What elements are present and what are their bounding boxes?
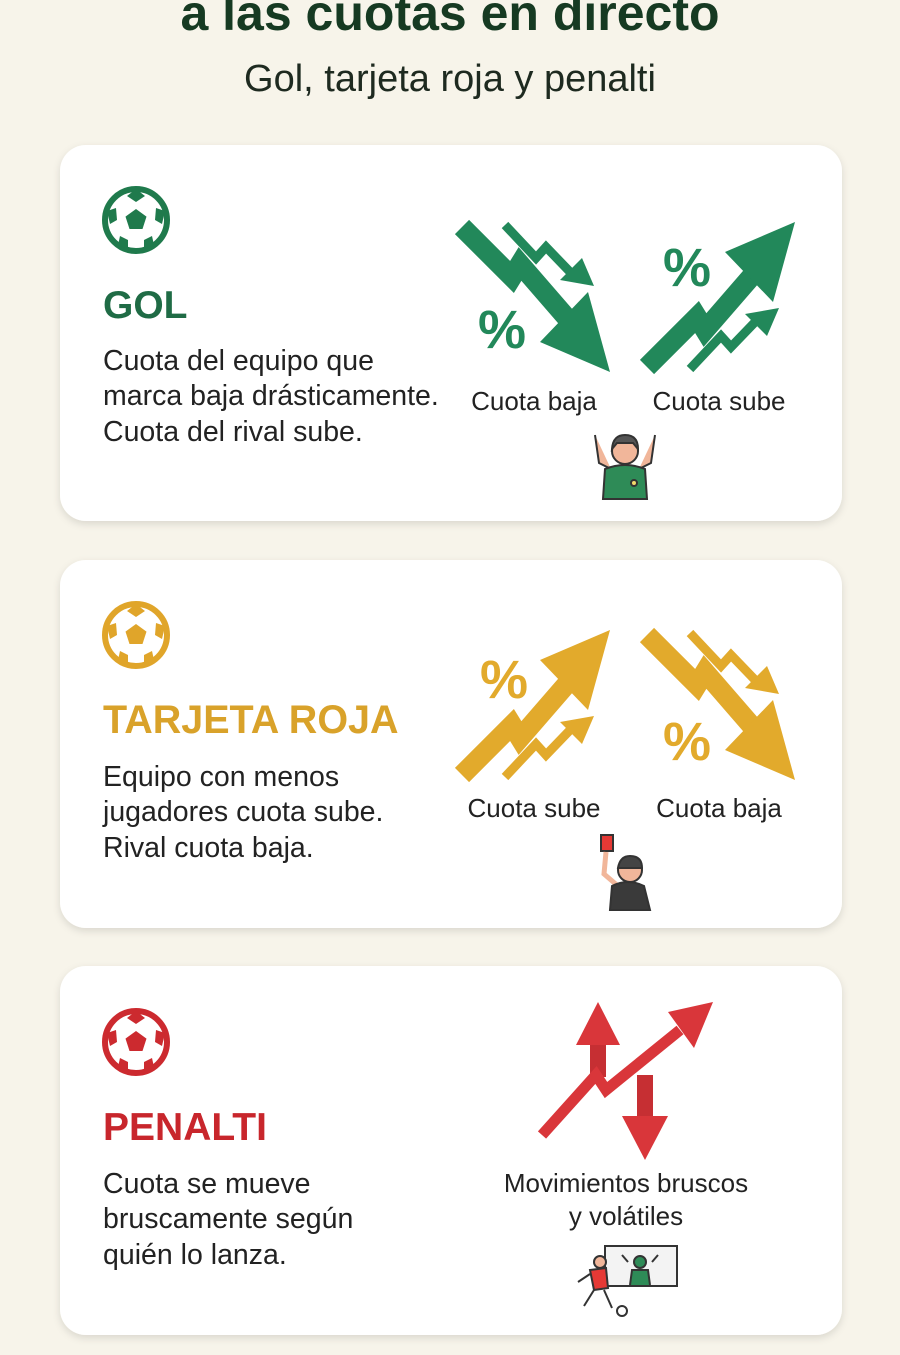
text block: penalti: quién lo lanza. — [103, 1239, 287, 1271]
icon: arrow up green — [647, 222, 795, 369]
text block: penalti: bruscamente según — [103, 1203, 353, 1235]
text block: gol: marca baja drásticamente. — [103, 380, 439, 412]
subtitle: Gol, tarjeta roja y penalti — [244, 58, 656, 100]
text block: penalti: Cuota se mueve — [103, 1168, 311, 1200]
icon: yellow ball — [105, 604, 167, 666]
text block: gol: Cuota del equipo que — [103, 345, 374, 377]
icon: arrow down green — [462, 225, 610, 372]
icon: green ball — [105, 189, 167, 251]
label: cuota sube: Cuota sube — [468, 793, 600, 823]
heading: penalti: PENALTI — [103, 1106, 267, 1149]
icon: celebrating player — [595, 435, 655, 499]
icon: arrow down yellow: % — [663, 712, 711, 772]
icon: red ball — [105, 1011, 167, 1073]
icon: arrow up yellow — [462, 630, 610, 777]
icon: arrow up yellow: % — [480, 650, 528, 710]
panel: tarjeta roja — [60, 560, 842, 928]
icon: arrow up green: % — [663, 238, 711, 298]
icon: arrow down yellow — [647, 633, 795, 780]
heading: tarjeta roja: TARJETA ROJA — [103, 698, 399, 742]
label: cuota baja: Cuota baja — [471, 386, 597, 416]
icon: arrow down green: % — [478, 300, 526, 360]
text block: tarjeta: Rival cuota baja. — [103, 832, 314, 864]
icon: volatile arrows — [542, 1002, 713, 1160]
label: cuota baja: Cuota baja — [656, 793, 782, 823]
icon: penalty kick — [578, 1246, 677, 1316]
heading: GOL: GOL — [103, 284, 188, 327]
label: movimientos: Movimientos bruscos — [504, 1168, 748, 1198]
text block: gol: Cuota del rival sube. — [103, 416, 363, 448]
icon: referee — [601, 835, 650, 910]
panel: penalti — [60, 966, 842, 1335]
text block: tarjeta: jugadores cuota sube. — [102, 796, 383, 828]
label: cuota sube: Cuota sube — [653, 386, 785, 416]
text block: tarjeta: Equipo con menos — [103, 761, 339, 793]
panel: gol — [60, 145, 842, 521]
label: movimientos: y volátiles — [569, 1201, 683, 1231]
